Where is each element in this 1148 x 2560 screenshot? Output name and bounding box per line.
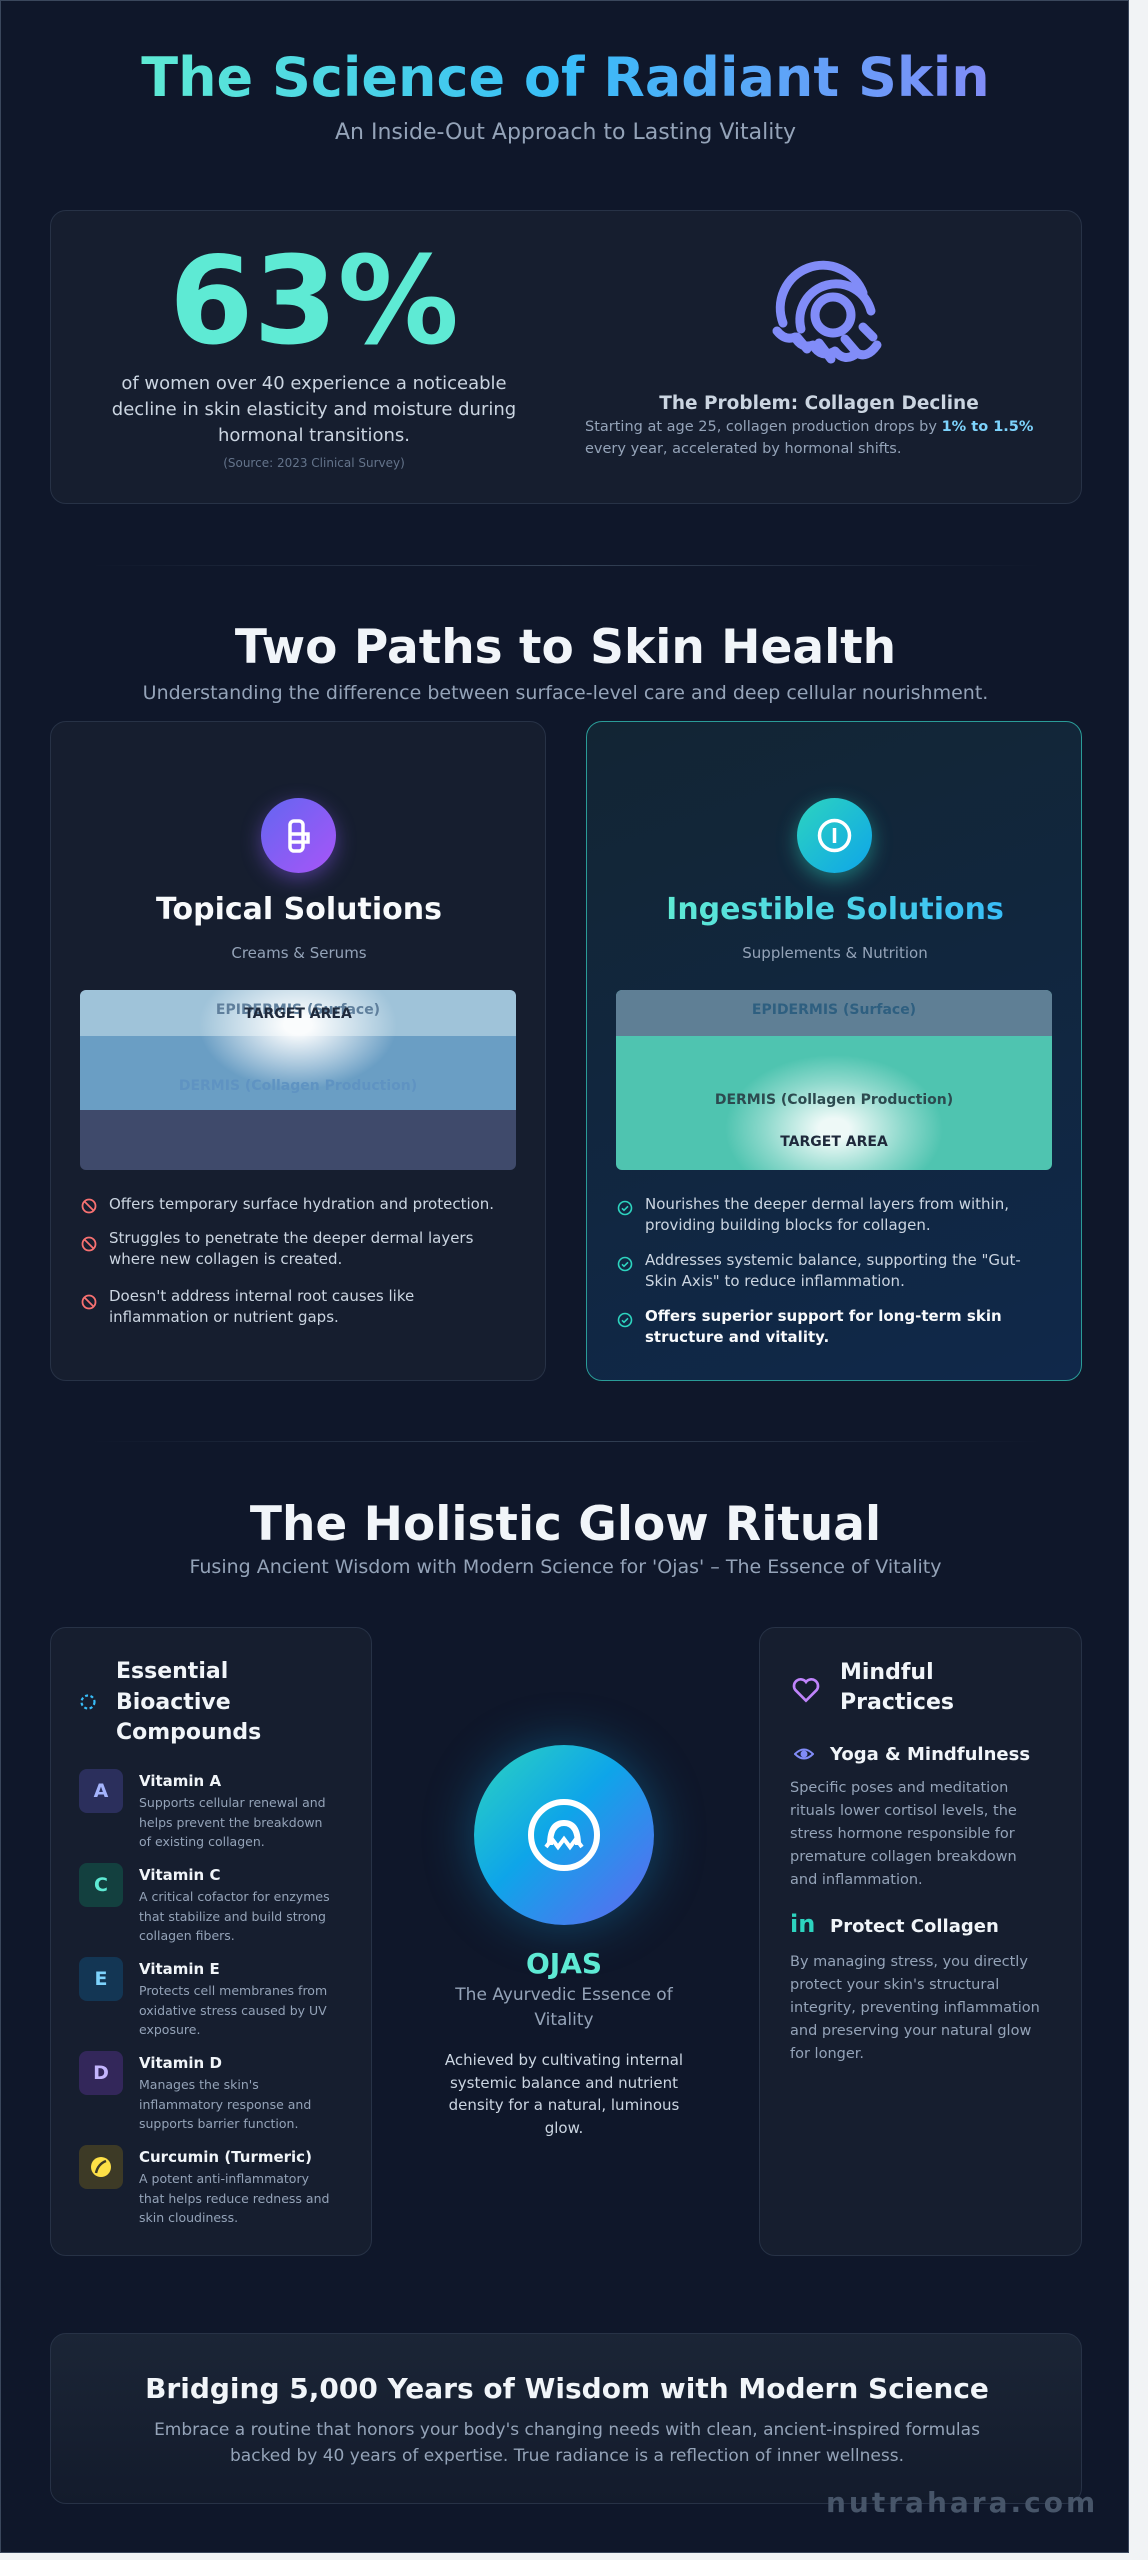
icon: heart	[792, 1678, 820, 1702]
list: vitamins: Curcumin (Turmeric)	[139, 2148, 312, 2166]
heading: Practices	[840, 1690, 954, 1715]
list: topical drawbacks: Offers temporary surface hydration and protection.	[109, 1195, 494, 1213]
list: vitamins: Manages the skin's inflammatory response and supports barrier function.	[139, 2077, 311, 2131]
list: topical drawbacks: Struggles to penetrate the deeper dermal layers where new collagen is created.	[109, 1229, 473, 1268]
list: vitamins: A critical cofactor for enzymes that stabilize and build strong collagen fibers.	[139, 1889, 330, 1943]
list: vitamins: E	[94, 1968, 107, 1990]
panel: compounds	[50, 1627, 372, 2256]
subheading: Fusing Ancient Wisdom with Modern Science for 'Ojas' – The Essence of Vitality	[190, 1556, 942, 1578]
icon: topical	[261, 798, 336, 873]
diagram: topical layers: DERMIS (Collagen Production)	[179, 1078, 417, 1094]
diagram: ingestible layers: DERMIS (Collagen Production)	[715, 1092, 953, 1108]
icon: atom	[80, 1694, 96, 1710]
panel: mindful	[759, 1627, 1082, 2256]
ojas subtitle: The Ayurvedic Essence of Vitality	[455, 1985, 673, 2030]
title: Ingestible Solutions	[666, 892, 1004, 927]
list: vitamins: Supports cellular renewal and helps prevent the breakdown of existing collagen.	[139, 1795, 326, 1849]
heading: two paths: Two Paths to Skin Health	[235, 620, 896, 675]
title: Topical Solutions	[156, 892, 442, 927]
heading: Compounds	[116, 1720, 261, 1745]
heading: Bioactive	[116, 1690, 231, 1714]
heading	[116, 1659, 261, 1745]
list: vitamins: A potent anti-inflammatory that helps reduce redness and skin cloudiness.	[139, 2171, 329, 2225]
ojas title: OJAS	[526, 1947, 602, 1980]
practice: protect collagen: Protect Collagen	[830, 1916, 999, 1937]
panel: topical	[50, 721, 546, 1381]
list: ingestible benefits: Nourishes the deeper dermal layers from within, providing building blocks for collagen.	[645, 1195, 1009, 1234]
text: Embrace a routine that honors your body's changing needs with clean, ancient-inspired formulas backed by 40 years of expertise. True radiance is a reflection of inner wellness.	[154, 2420, 980, 2466]
list: vitamins: Vitamin E	[139, 1960, 220, 1978]
source: (Source: 2023 Clinical Survey)	[223, 456, 405, 470]
list: vitamins: A	[94, 1780, 108, 1802]
practice: protect collagen: in	[790, 1910, 815, 1938]
title: The Science of Radiant Skin	[141, 46, 990, 109]
center: ojas	[445, 1720, 683, 2136]
heading: Bridging 5,000 Years of Wisdom with Modern Science	[145, 2372, 989, 2405]
list: vitamins: Vitamin C	[139, 1866, 220, 1884]
diagram: ingestible layers: TARGET AREA	[780, 1134, 888, 1150]
big stat: 63%	[169, 231, 459, 372]
heading: Essential	[116, 1659, 228, 1684]
stat text: of women over 40 experience a noticeable decline in skin elasticity and moisture during hormonal transitions.	[112, 373, 516, 446]
panel: bridging wisdom	[50, 2333, 1082, 2504]
panel: ingestible	[586, 721, 1082, 1381]
diagram: topical layers	[80, 990, 516, 1170]
panel: statistic	[50, 210, 1082, 504]
heading	[840, 1660, 954, 1715]
watermark: nutrahara.com	[826, 2486, 1098, 2519]
list: topical drawbacks	[82, 1195, 494, 1326]
icon: ojas circle	[474, 1745, 654, 1925]
diagram: ingestible layers	[616, 990, 1052, 1170]
problem text: Starting at age 25, collagen production drops by 1% to 1.5% every year, accelerated by hormonal shifts.	[585, 419, 1033, 457]
list: vitamins	[79, 1769, 330, 2225]
ojas text: Achieved by cultivating internal systemic balance and nutrient density for a natural, luminous glow.	[445, 2051, 683, 2136]
icon: collagen	[772, 260, 882, 364]
problem heading: The Problem: Collagen Decline	[659, 393, 979, 414]
list: vitamins: D	[93, 2062, 109, 2084]
list: ingestible benefits: Addresses systemic balance, supporting the "Gut-Skin Axis" to reduce inflammation.	[645, 1251, 1021, 1290]
subheading: Understanding the difference between surface-level care and deep cellular nourishment.	[143, 682, 988, 704]
diagram: topical layers: TARGET AREA	[244, 1006, 352, 1022]
heading: Mindful	[840, 1660, 934, 1685]
list: ingestible benefits: Offers superior support for long-term skin structure and vitality.	[645, 1307, 1002, 1346]
subtitle: Creams & Serums	[231, 944, 367, 962]
list: topical drawbacks: Doesn't address internal root causes like inflammation or nutrient gaps.	[109, 1287, 414, 1326]
subtitle: An Inside-Out Approach to Lasting Vitality	[335, 120, 796, 145]
list: ingestible benefits	[618, 1195, 1021, 1346]
list: vitamins: C	[94, 1874, 108, 1896]
practice: yoga: Specific poses and meditation rituals lower cortisol levels, the stress hormone responsible for premature collagen breakdown and inflammation.	[790, 1780, 1017, 1888]
list: vitamins: Protects cell membranes from oxidative stress caused by UV exposure.	[139, 1983, 327, 2037]
list: vitamins: Vitamin D	[139, 2054, 222, 2072]
heading: holistic ritual: The Holistic Glow Ritual	[250, 1497, 881, 1552]
practice: yoga: Yoga & Mindfulness	[830, 1744, 1030, 1765]
icon: ingestible	[797, 798, 872, 873]
diagram: topical layers: EPIDERMIS (Surface)	[216, 1002, 380, 1018]
subtitle: Supplements & Nutrition	[742, 944, 928, 962]
practice: protect collagen: By managing stress, you directly protect your skin's structural integrity, preventing inflammation and preserving your natural glow for longer.	[790, 1954, 1040, 2062]
list: vitamins: Vitamin A	[139, 1772, 221, 1790]
diagram: ingestible layers: EPIDERMIS (Surface)	[752, 1002, 916, 1018]
